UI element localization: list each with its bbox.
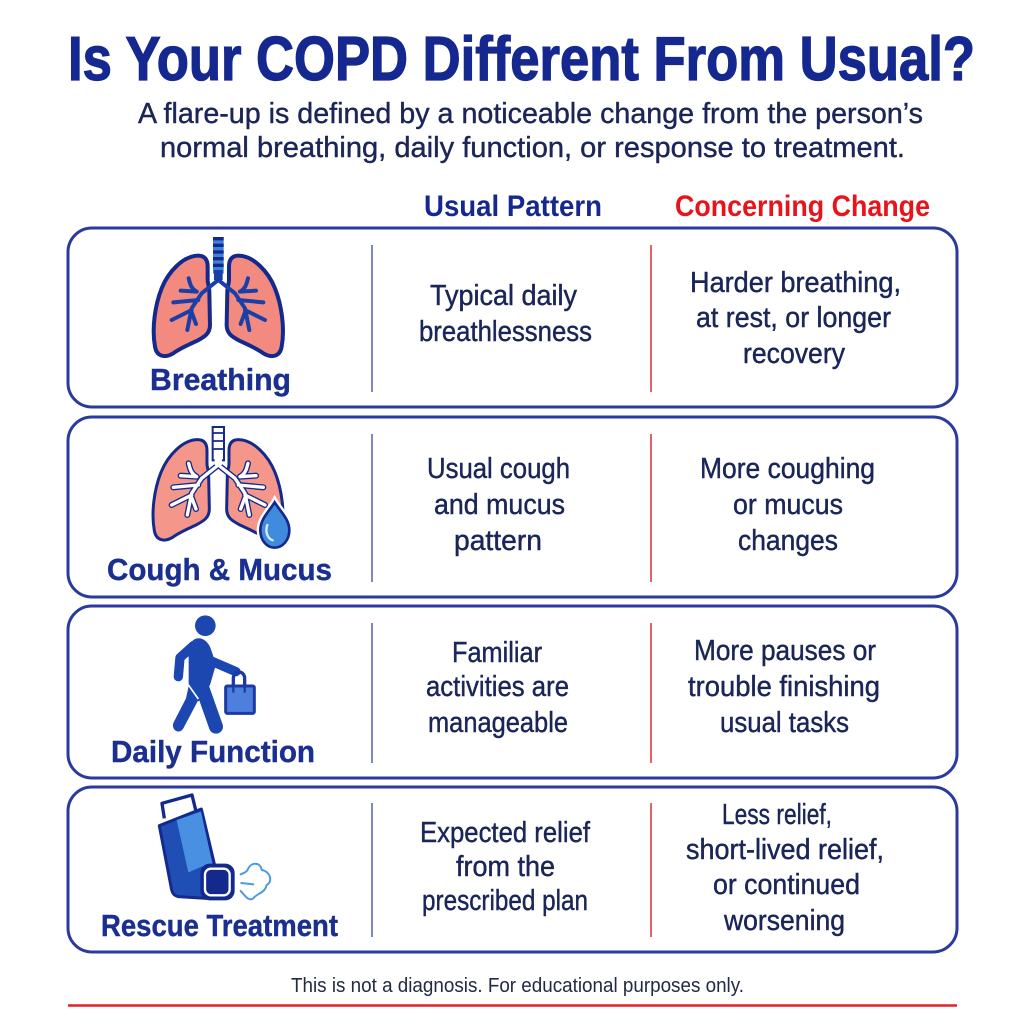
panel: breathing (68, 228, 957, 407)
subtitle: normal breathing, daily function, or response to treatment. (160, 132, 905, 164)
icon: inhaler (159, 795, 270, 900)
change text: breathing: recovery (743, 338, 845, 370)
label: cough and mucus: Cough & Mucus (107, 552, 332, 587)
icon: walking person with bag (173, 615, 254, 732)
change text: rescue: Less relief, (722, 799, 832, 831)
label: daily function: Daily Function (111, 734, 315, 769)
usual text: daily function: manageable (428, 707, 568, 739)
icon: lungs (154, 237, 283, 356)
icon: lungs with droplet (153, 427, 291, 549)
usual text: breathing: Typical daily (430, 280, 577, 312)
usual text: rescue: Expected relief (420, 817, 591, 849)
change text: breathing: at rest, or longer (696, 302, 891, 334)
icon: puff of air (241, 864, 270, 899)
change text: rescue: short-lived relief, (686, 834, 884, 866)
footer disclaimer: This is not a diagnosis. For educational purposes only. (291, 975, 744, 997)
usual text: cough: and mucus (434, 489, 565, 521)
usual text: cough: Usual cough (427, 453, 570, 485)
column heading: usual pattern: Usual Pattern (424, 190, 602, 223)
label: breathing: Breathing (150, 362, 291, 397)
change text: daily function (688, 635, 880, 739)
change text: daily function: More pauses or (694, 635, 876, 667)
usual text: daily function: Familiar (452, 637, 542, 669)
change text: breathing: Harder breathing, (690, 267, 901, 299)
usual text: rescue: from the (456, 851, 555, 883)
usual text: cough (427, 453, 570, 557)
change text: breathing (690, 267, 901, 370)
usual text: daily function: activities are (426, 671, 569, 703)
usual text: breathing (419, 280, 592, 348)
change text: rescue: or continued (713, 869, 860, 901)
change text: rescue (686, 799, 884, 937)
panel: cough and mucus (68, 417, 957, 597)
change text: cough: or mucus (733, 489, 843, 521)
usual text: breathing: breathlessness (419, 316, 592, 348)
change text: rescue: worsening (723, 905, 845, 937)
usual text: rescue (420, 817, 591, 917)
column heading: concerning change: Concerning Change (675, 190, 930, 223)
panel: rescue treatment (68, 787, 957, 952)
subtitle: A flare-up is defined by a noticeable change from the person’s (138, 98, 923, 130)
subtitle (138, 98, 923, 164)
usual text: rescue: prescribed plan (422, 885, 588, 917)
change text: cough (700, 453, 875, 557)
change text: daily function: trouble finishing (688, 671, 880, 703)
change text: cough: changes (738, 525, 838, 557)
usual text: daily function (426, 637, 569, 739)
panel: daily function (68, 606, 957, 778)
change text: daily function: usual tasks (720, 707, 849, 739)
change text: cough: More coughing (700, 453, 875, 485)
label: rescue treatment: Rescue Treatment (101, 908, 338, 943)
usual text: cough: pattern (454, 525, 542, 557)
